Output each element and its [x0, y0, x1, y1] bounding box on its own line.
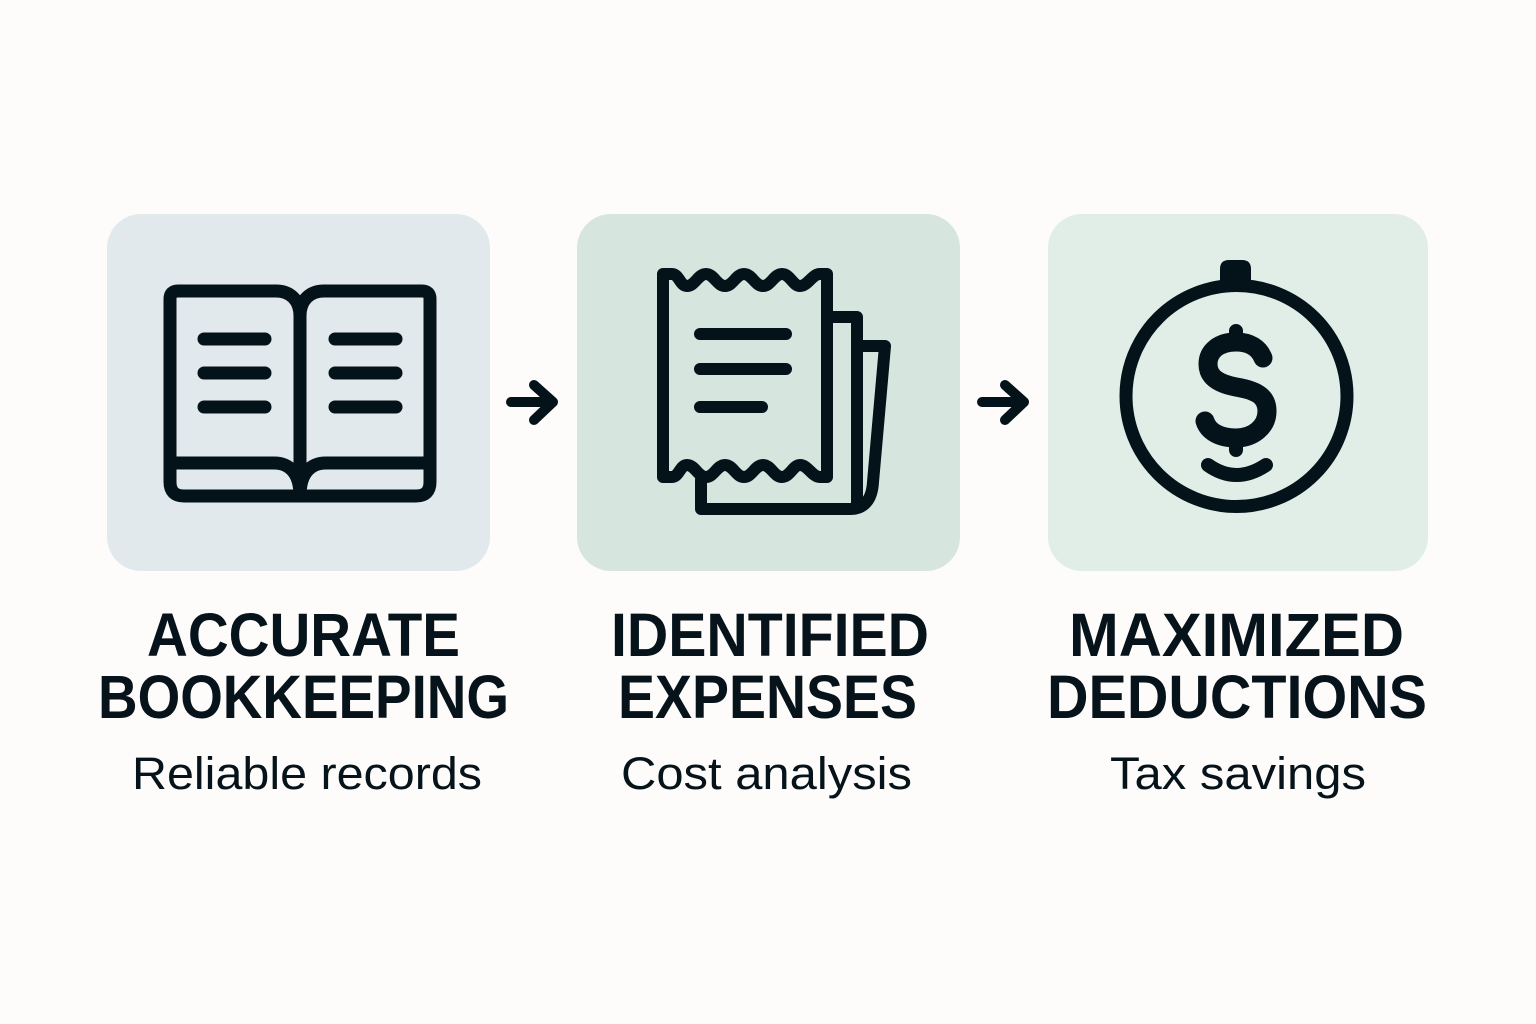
- icon: dollar coin: [1126, 260, 1347, 506]
- heading: accurate bookkeeping: [98, 601, 509, 731]
- icon: stacked receipts: [663, 274, 885, 509]
- panel: coin icon tile: [1048, 214, 1428, 571]
- panel: book icon tile: [107, 214, 490, 571]
- icon: open book: [170, 291, 430, 496]
- heading: identified expenses: IDENTIFIED: [611, 601, 929, 669]
- arrow: step 2 to step 3: [982, 385, 1024, 420]
- heading: identified expenses: EXPENSES: [618, 663, 917, 731]
- heading: identified expenses: [611, 601, 929, 731]
- step 2: identified expenses: [577, 214, 960, 799]
- heading: maximized deductions: MAXIMIZED: [1069, 601, 1404, 669]
- step 3: maximized deductions: [1047, 214, 1428, 799]
- caption: tax savings: Tax savings: [1110, 748, 1366, 799]
- heading: maximized deductions: DEDUCTIONS: [1047, 663, 1427, 731]
- arrow: step 1 to step 2: [511, 385, 553, 420]
- step 1: accurate bookkeeping: [98, 214, 509, 799]
- heading: accurate bookkeeping: BOOKKEEPING: [98, 663, 509, 731]
- caption: cost analysis: Cost analysis: [621, 748, 912, 799]
- heading: accurate bookkeeping: ACCURATE: [147, 601, 460, 669]
- panel: receipt icon tile: [577, 214, 960, 571]
- caption: reliable records: Reliable records: [132, 748, 482, 799]
- heading: maximized deductions: [1047, 601, 1427, 731]
